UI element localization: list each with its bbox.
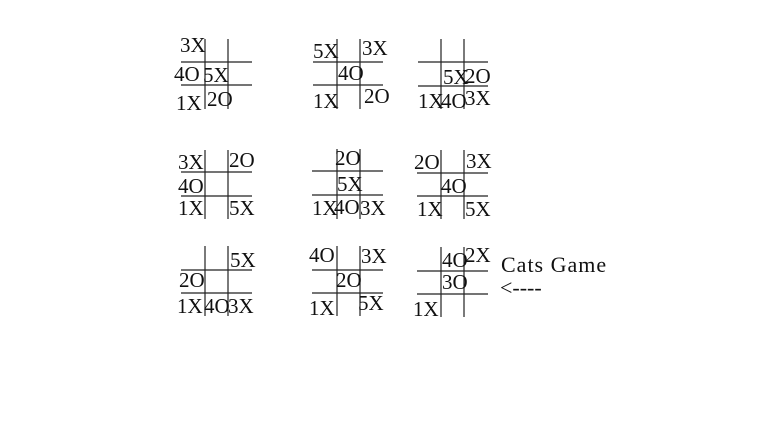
board 7: 1X: [177, 294, 203, 318]
board 4: 3X: [178, 150, 204, 174]
board 1: 3X: [180, 33, 206, 57]
board 9: 2X: [465, 243, 491, 267]
board 4: 5X: [229, 196, 255, 220]
board 8: 3X: [361, 244, 387, 268]
board 6: 3X: [466, 149, 492, 173]
board 2: 3X: [362, 36, 388, 60]
board 5: 3X: [360, 196, 386, 220]
board 5: 1X: [312, 196, 338, 220]
board 2: 2O: [364, 84, 390, 108]
board 6: 4O: [441, 174, 467, 198]
board 9: 3O: [442, 270, 468, 294]
board 7: 3X: [228, 294, 254, 318]
callout: cats game: Cats Game: [501, 252, 607, 277]
board 5: [312, 146, 386, 220]
board 4: 1X: [178, 196, 204, 220]
board 7: 4O: [204, 294, 230, 318]
board 1: 5X: [203, 63, 229, 87]
board 8: [309, 243, 387, 320]
board 1: 1X: [176, 91, 202, 115]
board 6: 5X: [465, 197, 491, 221]
board 4: 2O: [229, 148, 255, 172]
board 2: 5X: [313, 39, 339, 63]
board 9: 4O: [442, 248, 468, 272]
board 6: [414, 149, 492, 221]
board 7: 2O: [179, 268, 205, 292]
board 2: 1X: [313, 89, 339, 113]
board 9: 1X: [413, 297, 439, 321]
board 1: 4O: [174, 62, 200, 86]
board 8: 1X: [309, 296, 335, 320]
board 8: 5X: [358, 291, 384, 315]
board 5: 5X: [337, 172, 363, 196]
board 8: 2O: [336, 268, 362, 292]
board 3: 4O: [441, 89, 467, 113]
arrow: points to board 9: <----: [500, 275, 542, 300]
board 6: 1X: [417, 197, 443, 221]
board 3: 5X: [443, 65, 469, 89]
board 3: 3X: [465, 86, 491, 110]
board 8: 4O: [309, 243, 335, 267]
board 4: 4O: [178, 174, 204, 198]
board 6: 2O: [414, 150, 440, 174]
board 2: [313, 36, 390, 113]
board 7: 5X: [230, 248, 256, 272]
board 3: [418, 39, 491, 113]
board 3: 2O: [465, 64, 491, 88]
board 4: [178, 148, 255, 220]
board 2: 4O: [338, 61, 364, 85]
board 7: [177, 246, 256, 318]
board 5: 4O: [334, 195, 360, 219]
board 1: [174, 33, 252, 115]
board 1: 2O: [207, 87, 233, 111]
board 5: 2O: [335, 146, 361, 170]
board 3: 1X: [418, 89, 444, 113]
board 9: [413, 243, 491, 321]
